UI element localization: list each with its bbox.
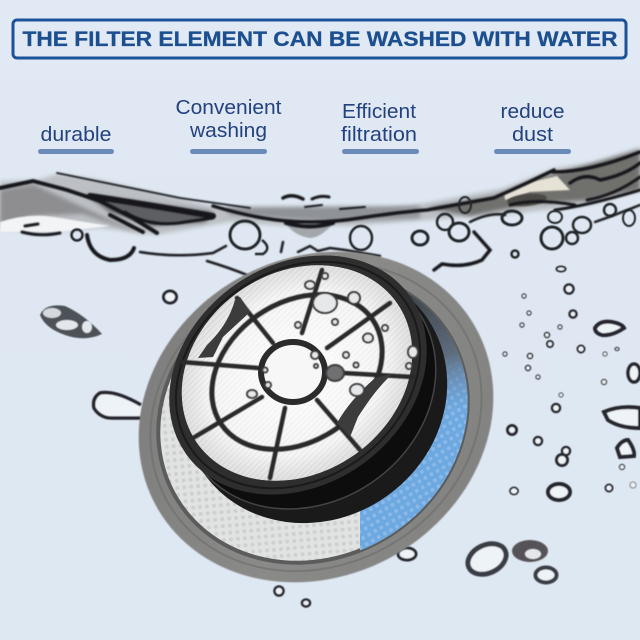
filter product [138, 251, 494, 584]
feature: durable: durable [40, 124, 112, 146]
feature: convenient washing: washing [189, 120, 267, 142]
outer grey gasket [78, 188, 554, 640]
title banner: THE FILTER ELEMENT CAN BE WASHED WITH WATER [22, 28, 618, 51]
large drop left [40, 305, 102, 338]
title banner [13, 20, 626, 58]
feature: convenient washing [176, 97, 282, 154]
feature: reduce dust: dust [512, 124, 553, 146]
grille ribs [182, 263, 413, 481]
water droplets [40, 266, 640, 606]
front frame ring [123, 206, 473, 544]
feature: durable [38, 124, 114, 154]
grille wedge braces [198, 297, 392, 437]
black filter body [132, 215, 498, 575]
feature: reduce dust [494, 101, 571, 154]
centre hub [261, 342, 325, 402]
droplets on filter [247, 273, 418, 398]
open drop left [94, 392, 141, 418]
mesh pleat band [156, 288, 470, 565]
feature: efficient filtration: filtration [341, 124, 417, 146]
dark mesh section [408, 294, 468, 404]
feature: efficient filtration: Efficient [342, 101, 416, 123]
blue mesh section [360, 330, 468, 550]
water surface wave [0, 147, 640, 275]
feature: convenient washing: Convenient [176, 97, 282, 119]
feature: efficient filtration [341, 101, 419, 154]
feature: reduce dust: reduce [500, 101, 564, 123]
